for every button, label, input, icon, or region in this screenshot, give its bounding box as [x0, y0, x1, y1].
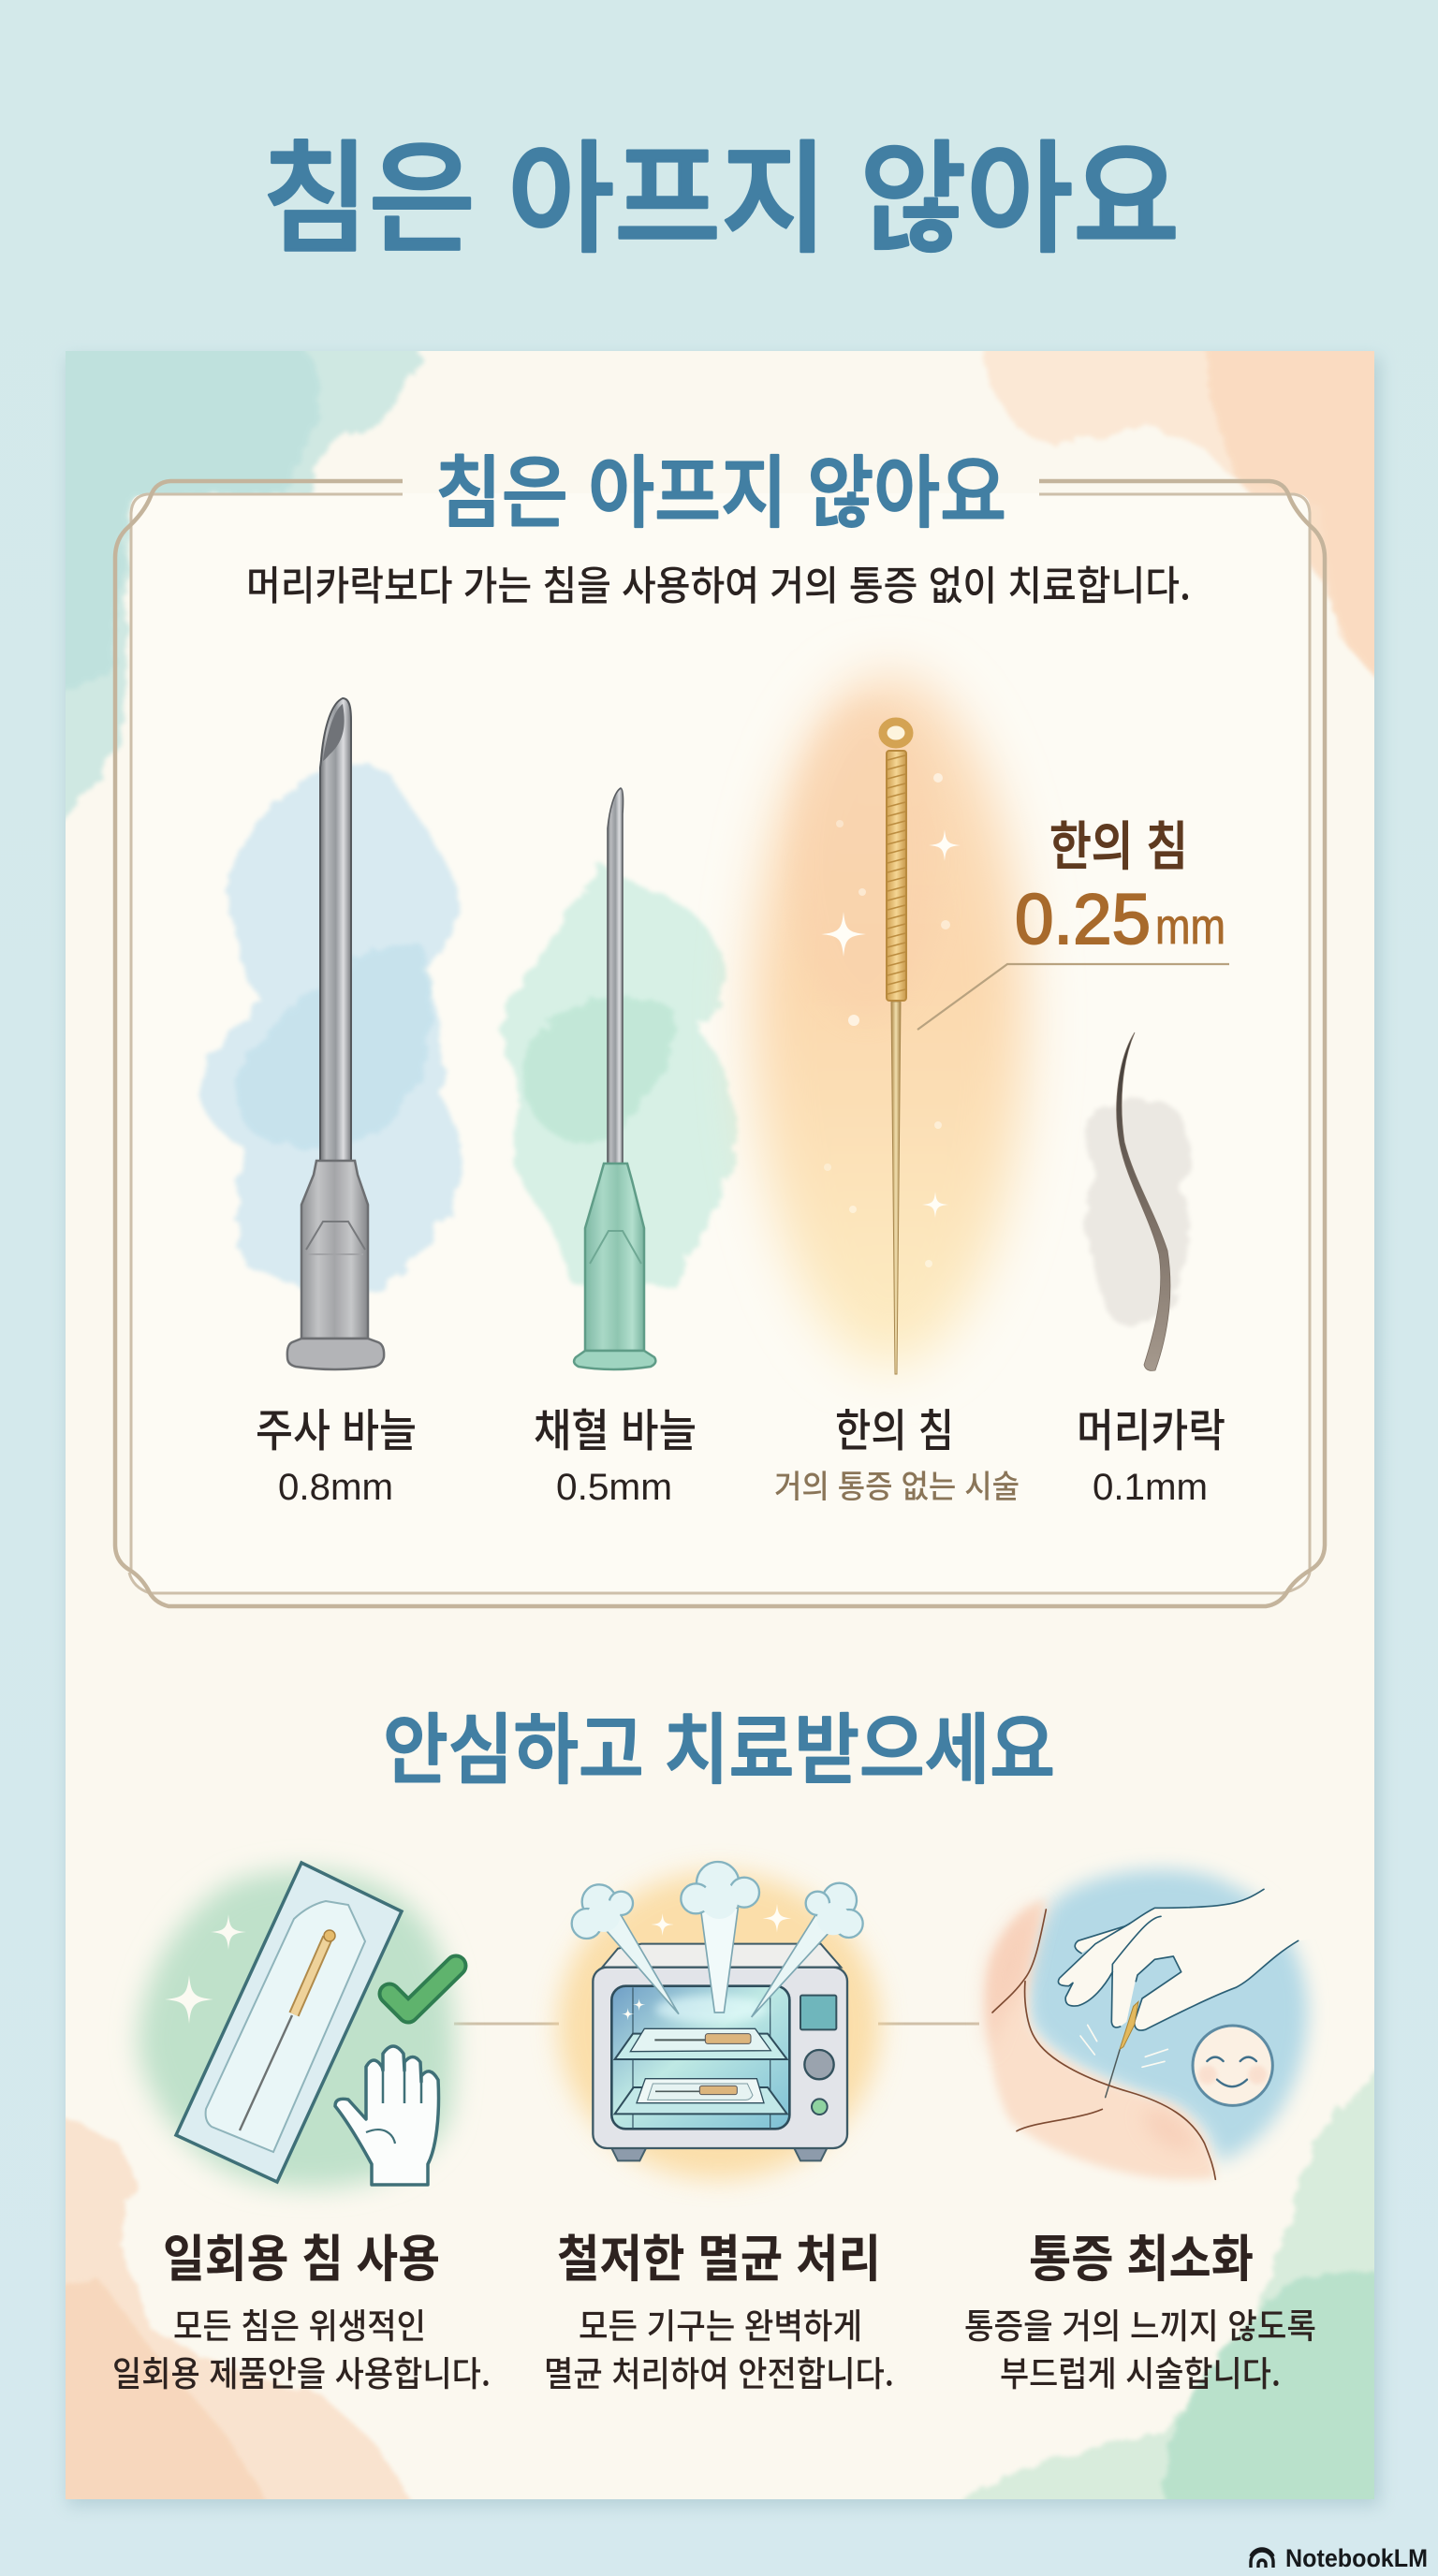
callout: acupuncture needle size: mm: [1155, 899, 1225, 955]
callout: acupuncture needle size: 0.25: [1015, 880, 1151, 959]
label: acupuncture needle: 거의 통증 없는 시술: [774, 1461, 1020, 1507]
watermark: NotebookLM: NotebookLM: [1285, 2544, 1428, 2572]
text: subtitle: 머리카락보다 가는 침을 사용하여 거의 통증 없이 치료합니다.: [246, 554, 1191, 612]
text: sterilization: [544, 2217, 894, 2396]
icon: disposable needle pack: [139, 1863, 456, 2188]
text: disposable needle: 일회용 제품안을 사용합니다.: [112, 2346, 491, 2396]
heading: safety section: 안심하고 치료받으세요: [383, 1688, 1055, 1799]
item: hair: [1085, 1032, 1192, 1370]
label: injection needle: 0.8mm: [278, 1467, 393, 1508]
label: blood collection needle: 채혈 바늘: [534, 1394, 697, 1459]
text: sterilization: 철저한 멸균 처리: [557, 2217, 881, 2291]
text: minimal pain: 부드럽게 시술합니다.: [1000, 2346, 1281, 2396]
label: blood collection needle: 0.5mm: [556, 1467, 672, 1508]
panel: main card: [56, 342, 1386, 2509]
text: minimal pain: 통증 최소화: [1029, 2217, 1254, 2291]
connector: second to third: [878, 2022, 979, 2026]
connector: first to second: [454, 2022, 559, 2026]
icon: gentle needling hand: [985, 1870, 1323, 2180]
label: injection needle: 주사 바늘: [256, 1394, 417, 1459]
item: blood collection needle: [503, 788, 736, 1369]
text: disposable needle: 모든 침은 위생적인: [173, 2298, 426, 2349]
text: sterilization: 모든 기구는 완벽하게: [579, 2298, 862, 2349]
text: sterilization: 멸균 처리하여 안전합니다.: [544, 2346, 894, 2396]
main title: 침은 아프지 않아요: [262, 101, 1180, 277]
label: acupuncture needle: [774, 1394, 1020, 1507]
label: blood collection needle: [534, 1394, 697, 1508]
icon: sterilizer oven: [558, 1862, 880, 2179]
heading: needle panel: 침은 아프지 않아요: [435, 431, 1006, 544]
label: hair: [1077, 1394, 1225, 1508]
label: acupuncture needle: 한의 침: [835, 1394, 954, 1459]
text: disposable needle: 일회용 침 사용: [163, 2217, 440, 2291]
item: acupuncture needle with glow: [754, 674, 1025, 1374]
label: injection needle: [256, 1394, 417, 1508]
label: hair: 머리카락: [1077, 1394, 1225, 1459]
text: minimal pain: 통증을 거의 느끼지 않도록: [964, 2298, 1316, 2349]
item: injection needle: [199, 698, 461, 1369]
callout: acupuncture needle size: 한의 침: [1049, 805, 1188, 881]
callout: acupuncture needle size: [917, 805, 1229, 1030]
panel: needle comparison frame: [115, 481, 1325, 1606]
text: disposable needle: [112, 2217, 491, 2396]
label: hair: 0.1mm: [1093, 1467, 1208, 1508]
text: minimal pain: [964, 2217, 1316, 2396]
